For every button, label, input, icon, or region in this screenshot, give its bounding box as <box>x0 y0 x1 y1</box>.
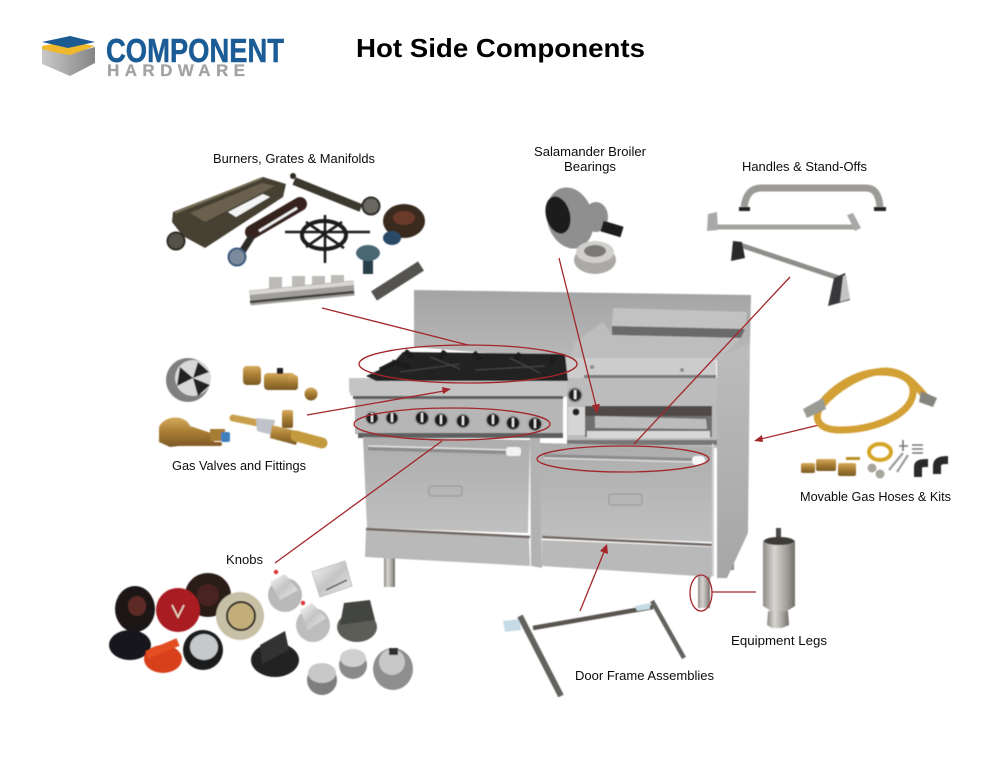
black pointer knob <box>109 630 151 660</box>
logo wordmark: COMPONENT <box>106 32 284 69</box>
slim bar burner <box>290 173 380 214</box>
callout: salamander arrow <box>559 258 600 414</box>
gas manifold <box>250 275 354 302</box>
restraint ring <box>869 444 891 460</box>
burner bracket <box>374 266 421 296</box>
label: salamander: Bearings <box>564 159 617 174</box>
label: salamander: Salamander Broiler <box>534 144 647 159</box>
frame tabs <box>503 603 650 632</box>
logo sub-wordmark: HARDWARE <box>107 61 245 80</box>
parts: movable gas hoses and kits <box>801 371 948 478</box>
hose fitting left <box>803 398 826 418</box>
burner grates <box>366 351 568 381</box>
washers <box>868 464 884 478</box>
brass hose fittings <box>801 457 860 476</box>
rear foot <box>727 560 734 570</box>
black dial <box>115 586 155 632</box>
griddle <box>563 308 747 380</box>
parts: salamander bearings <box>540 182 622 274</box>
knob rail shadow <box>358 433 563 438</box>
chrome knob one <box>268 570 302 612</box>
salamander control <box>568 388 585 435</box>
safety valve disc <box>166 358 211 402</box>
leg hex foot <box>767 611 789 628</box>
ring bearing <box>574 241 616 274</box>
parts: gas valves and fittings <box>159 358 322 447</box>
callout: burners line and ellipse <box>322 308 577 383</box>
roller core <box>541 194 575 236</box>
logo icon: layered square <box>42 36 95 76</box>
salamander broiler <box>567 406 717 445</box>
parts: burners, grates and manifolds <box>168 173 425 302</box>
label: burners: Burners, Grates & Manifolds <box>213 151 375 166</box>
small hardware <box>899 440 923 453</box>
chrome rectangular knob <box>312 561 352 597</box>
left oven door <box>363 437 530 533</box>
parts: door frame assemblies <box>503 601 684 696</box>
label: gas hoses: Movable Gas Hoses & Kits <box>800 489 951 504</box>
range illustration <box>349 290 751 608</box>
burner head <box>356 245 380 274</box>
tube burner <box>228 204 300 266</box>
straight handle <box>707 212 861 231</box>
bearing housing <box>584 202 608 232</box>
red dial <box>156 588 200 632</box>
label: handles: Handles & Stand-Offs <box>742 159 867 174</box>
left leg <box>384 558 395 587</box>
bearing stud <box>602 226 622 232</box>
brass fittings <box>243 366 318 400</box>
burner grate <box>285 215 370 263</box>
callout: gas hoses arrow <box>754 425 819 442</box>
red pointer knob <box>144 642 182 673</box>
title: Hot Side Components <box>356 33 645 63</box>
black elbows <box>918 460 948 477</box>
chrome knob two <box>296 601 330 642</box>
control knobs <box>366 411 542 431</box>
shut-off valve <box>159 418 230 447</box>
callout: gas valves arrow <box>307 387 451 415</box>
leg top opening <box>764 537 794 545</box>
parts: knobs <box>109 561 413 695</box>
black graduated knob <box>251 631 299 677</box>
control panel <box>355 396 563 434</box>
right leg <box>698 575 710 608</box>
dark grey knob <box>337 600 377 642</box>
gas hose <box>817 371 925 430</box>
callout: knobs line and ellipse <box>275 408 550 563</box>
label: knobs: Knobs <box>226 552 263 567</box>
brown dial <box>185 573 231 617</box>
leg cylinder <box>763 538 795 611</box>
right rail <box>652 601 684 658</box>
restraint chain <box>889 453 908 472</box>
side panel <box>717 343 750 578</box>
burner valve <box>233 410 322 445</box>
angled handle <box>731 241 850 306</box>
tan dial <box>216 592 264 640</box>
label: door frames: Door Frame Assemblies <box>575 668 714 683</box>
roller wheel <box>540 182 600 254</box>
control and salamander panel <box>567 378 717 448</box>
label: legs: Equipment Legs <box>731 633 828 648</box>
chrome appliance knob <box>373 648 413 690</box>
parts: equipment leg <box>763 528 795 628</box>
callout: legs line and ellipse <box>690 575 756 611</box>
label: salamander <box>534 144 647 174</box>
knob pointers <box>371 413 536 428</box>
center post <box>530 438 542 568</box>
ring burner <box>383 204 425 245</box>
kick panels <box>365 444 713 577</box>
callout: door frame arrow <box>580 544 608 611</box>
satin knob one <box>307 663 337 695</box>
hose fitting right <box>919 391 937 407</box>
satin knob two <box>339 649 367 679</box>
curved handle <box>739 188 886 211</box>
parts: handles and stand-offs <box>707 188 886 306</box>
left rail <box>520 616 561 696</box>
silver top dial <box>183 630 223 670</box>
right oven door <box>540 443 712 542</box>
large bar burner <box>168 177 286 250</box>
threaded stud <box>776 528 781 542</box>
frame crossbar <box>533 607 653 628</box>
logo: Component Hardware <box>42 32 284 80</box>
backsplash <box>414 290 751 360</box>
callout: handles line and ellipse <box>537 277 790 472</box>
cooktop shelf <box>349 378 567 399</box>
label: gas valves: Gas Valves and Fittings <box>172 458 306 473</box>
